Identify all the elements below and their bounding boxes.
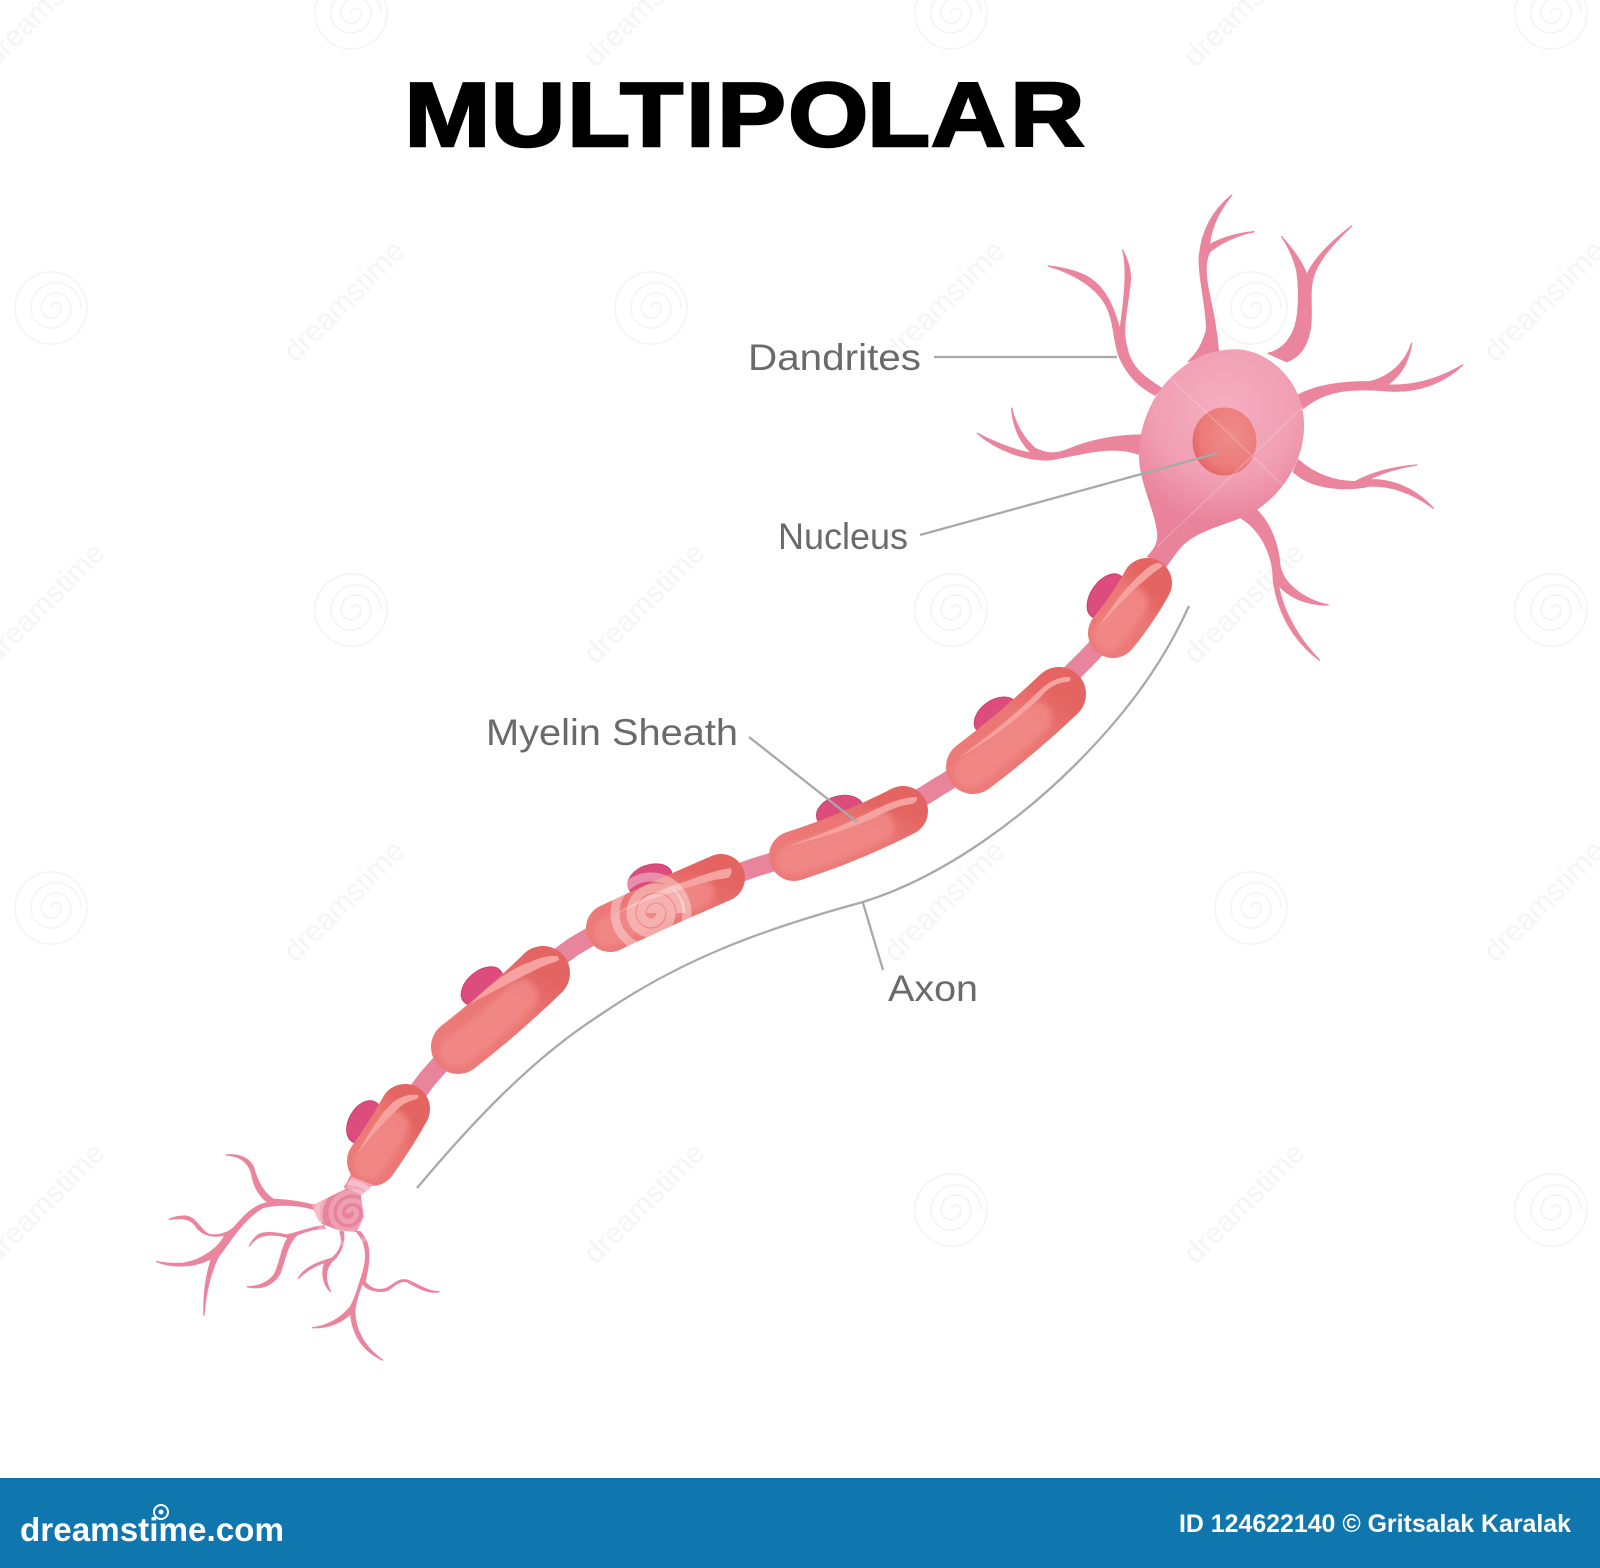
cell body — [1139, 349, 1304, 567]
watermark pattern: dreamstime — [1177, 1136, 1311, 1270]
watermark pattern: dreamstime — [577, 1136, 711, 1270]
myelin highlights — [357, 563, 1163, 1155]
label: Nucleus — [778, 453, 1218, 557]
label: Myelin Sheath — [486, 712, 857, 822]
watermark pattern: dreamstime — [877, 834, 1011, 968]
watermark pattern: dreamstime — [277, 834, 411, 968]
axon fibre — [352, 550, 1165, 1192]
axon terminal — [157, 1155, 439, 1360]
watermark pattern: dreamstime — [1177, 536, 1311, 670]
title: MULTIPOLAR — [404, 64, 1085, 166]
label: Nucleus: Nucleus — [778, 516, 908, 557]
footer banner — [0, 1478, 1600, 1568]
brand wordmark: dreamstime.com — [20, 1511, 284, 1548]
label: Axon with bracket — [417, 606, 1189, 1188]
image credit: ID 124622140 © Gritsalak Karalak — [1179, 1510, 1571, 1538]
watermark pattern: dreamstime — [277, 234, 411, 368]
label: Myelin Sheath: Myelin Sheath — [486, 712, 738, 753]
label: Dandrites: Dandrites — [748, 337, 921, 378]
dendrites — [977, 195, 1463, 660]
watermark pattern: dreamstime — [877, 234, 1011, 368]
schwann cell nuclei — [340, 567, 1133, 1149]
label: Axon with bracket: Axon — [888, 968, 978, 1009]
watermark pattern: dreamstime — [577, 536, 711, 670]
neuron illustration — [157, 195, 1463, 1360]
myelin sheath segments — [369, 583, 1147, 1164]
nucleus — [1192, 408, 1256, 476]
capsule bases — [372, 583, 1147, 1161]
watermark swirls over artwork — [317, 378, 1303, 1244]
capsule inner glow — [369, 603, 1133, 1164]
